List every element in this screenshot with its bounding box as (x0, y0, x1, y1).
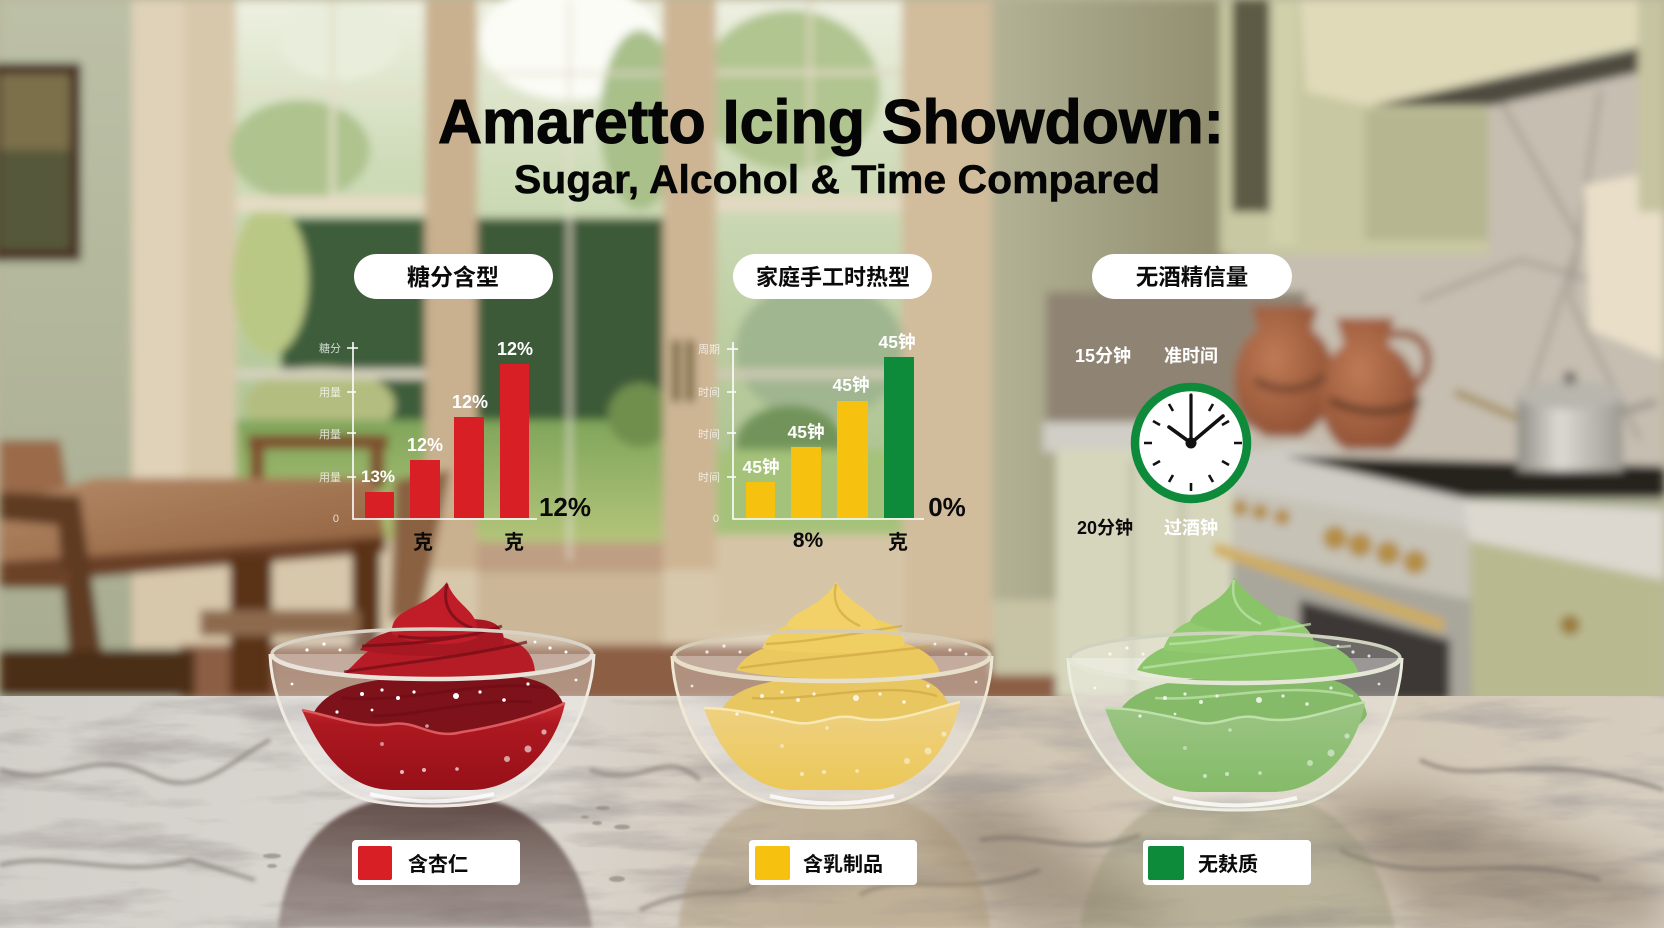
bowl: red icing (270, 582, 594, 806)
bar chart: sugar: 13% (361, 467, 395, 486)
bar chart: time: 克 (888, 531, 908, 554)
marble countertop (0, 696, 1664, 928)
bar chart: sugar: 用量 (319, 428, 341, 441)
panel: homemade heat chart (698, 254, 966, 554)
bar chart: time: 时间 (698, 471, 720, 484)
yellow glass front (672, 656, 992, 808)
time labels: 准时间 (1164, 346, 1218, 366)
main heading: Amaretto Icing Showdown: (438, 88, 1224, 157)
bar chart: time: 45钟 (833, 375, 869, 395)
terracotta jugs and steel pot (1234, 306, 1656, 471)
bar chart: sugar: 0 (333, 513, 339, 525)
sage wall right (992, 0, 1232, 640)
icon: clock (1135, 387, 1247, 499)
bar chart: sugar (319, 339, 591, 554)
time labels: 15分钟 (1075, 346, 1131, 366)
bar chart: sugar: 12% (407, 435, 443, 455)
bar chart: sugar: 用量 (319, 471, 341, 484)
bar chart: sugar: 12% (497, 339, 533, 359)
red glass back (270, 654, 594, 806)
legend: contains almond (352, 840, 520, 885)
bowl shadows (900, 790, 1664, 928)
bar chart: sugar: 12% (539, 492, 591, 522)
countertop water droplets (263, 806, 630, 882)
red icing mound (312, 582, 564, 734)
bar chart: sugar: 克 (504, 531, 524, 554)
framed picture on wall (0, 63, 81, 261)
subheading: Sugar, Alcohol & Time Compared (514, 158, 1160, 202)
red liquid (302, 703, 565, 790)
bowl: green icing (1068, 577, 1402, 810)
bar chart: time: 8% (793, 529, 823, 552)
bar chart: time: 周期 (698, 343, 720, 356)
bar chart: time (698, 332, 966, 554)
time labels: 20分钟 (1077, 518, 1133, 538)
bar chart: time: 45钟 (788, 422, 824, 442)
time labels: 过酒钟 (1164, 518, 1218, 538)
yellow liquid (704, 702, 960, 790)
green glass back (1068, 658, 1402, 810)
bar chart: sugar: 糖分 (319, 341, 341, 355)
title (438, 88, 1224, 202)
legend: contains dairy (749, 840, 917, 885)
bowl: yellow icing (672, 582, 992, 808)
kitchen: backsplash, cabinets, hood (1043, 0, 1664, 700)
floor (180, 645, 1080, 700)
legend: contains dairy: 含乳制品 (803, 852, 883, 876)
bar chart: time: 45钟 (879, 332, 915, 352)
green glass front (1068, 658, 1402, 810)
heading pill: alcohol-free (1092, 254, 1292, 299)
legend: gluten-free (1143, 840, 1311, 885)
legend: contains almond: 含杏仁 (408, 852, 468, 876)
heading pill: alcohol-free: 无酒精信量 (1136, 265, 1248, 290)
bar chart: time: 时间 (698, 386, 720, 399)
panel: alcohol-free clock (1075, 254, 1292, 538)
panel: sugar chart (319, 254, 591, 554)
heading pill: homemade: 家庭手工时热型 (756, 265, 910, 290)
bar chart: sugar: 12% (452, 392, 488, 412)
bar chart: time: 0 (713, 513, 719, 525)
window and French door (132, 0, 992, 648)
yellow icing mound (720, 582, 952, 736)
bowl reflection: green (1080, 800, 1395, 928)
bar chart: sugar: 克 (413, 531, 433, 554)
red glass front (270, 654, 594, 806)
dining table and chairs (0, 435, 450, 696)
yellow glass back (672, 656, 992, 808)
bar chart: time: 45钟 (743, 457, 779, 477)
legend: gluten-free: 无麸质 (1198, 853, 1258, 876)
green icing mound (1117, 577, 1367, 738)
heading pill: sugar: 糖分含型 (407, 264, 499, 290)
bowl reflection: red (278, 800, 592, 928)
green liquid (1105, 702, 1365, 792)
bowl reflection: yellow (678, 800, 990, 928)
background: blurred country kitchen scene (0, 0, 1664, 700)
heading pill: homemade (733, 254, 932, 299)
heading pill: sugar (354, 254, 553, 299)
time labels (1075, 346, 1218, 538)
bar chart: time: 时间 (698, 428, 720, 441)
bar chart: sugar: 用量 (319, 386, 341, 399)
bar chart: time: 0% (928, 492, 966, 522)
